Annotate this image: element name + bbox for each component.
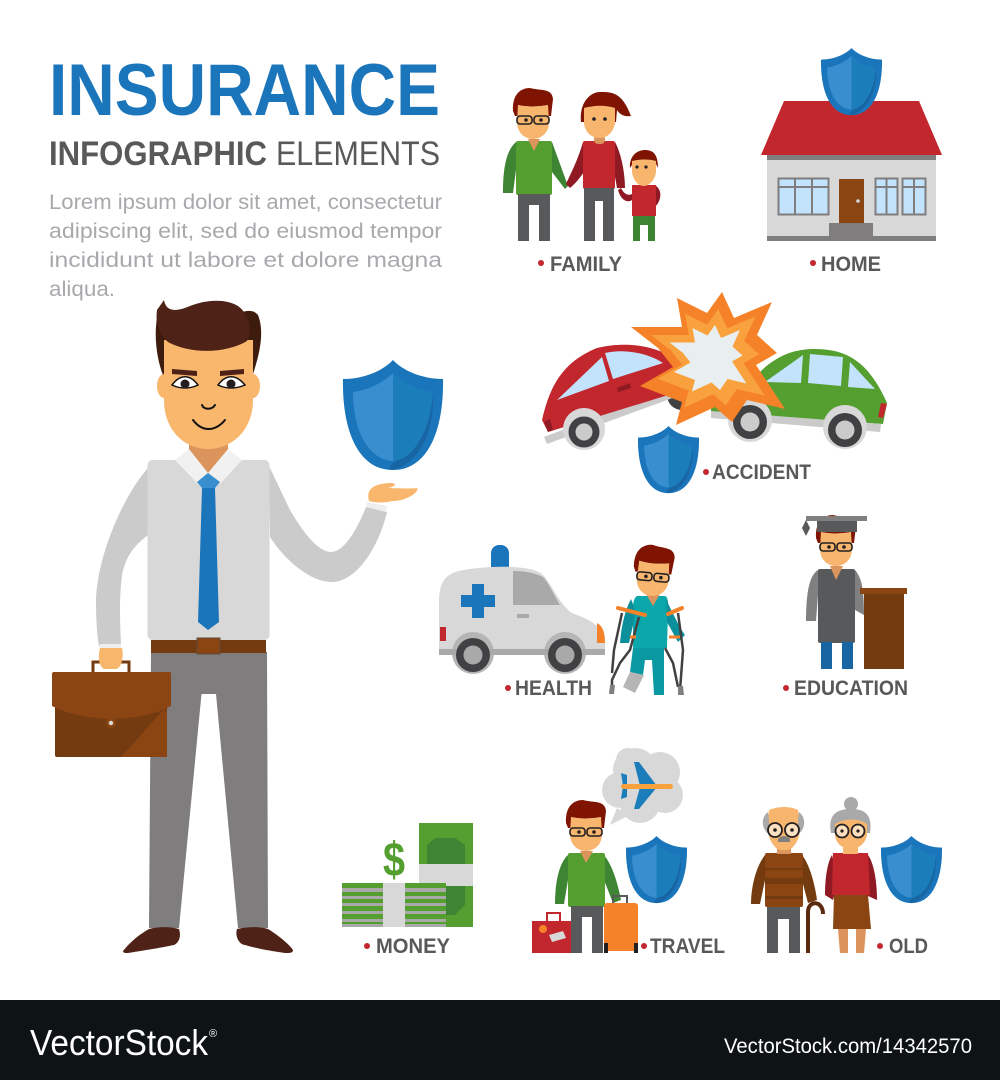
house walls	[767, 160, 936, 236]
left arm	[96, 468, 148, 646]
collar	[175, 449, 242, 484]
label: education: EDUCATION	[794, 677, 908, 700]
ears	[157, 374, 171, 398]
father	[503, 88, 568, 241]
label: travel: TRAVEL	[650, 935, 725, 958]
subtitle: ELEMENTS	[276, 135, 440, 173]
title: INSURANCE: INSURANCE	[49, 50, 440, 131]
item: old	[751, 797, 942, 953]
belt	[151, 640, 266, 653]
old man	[751, 807, 817, 953]
large shield	[343, 360, 443, 470]
right cuff	[366, 502, 387, 512]
label: old	[877, 935, 928, 958]
shoes	[123, 927, 293, 953]
item: education	[802, 515, 907, 669]
green car	[711, 349, 887, 449]
mother	[566, 92, 631, 241]
footer URL: VectorStock.com/14342570	[724, 1035, 972, 1058]
briefcase	[52, 662, 171, 757]
trousers	[149, 652, 268, 928]
item: travel	[532, 748, 687, 953]
ambulance	[439, 545, 605, 674]
footer logo: ®	[209, 1028, 217, 1040]
label: home: HOME	[821, 253, 881, 276]
home shield	[821, 48, 882, 115]
body text: aliqua.	[49, 277, 115, 301]
item: money	[342, 823, 473, 927]
old age shield	[881, 836, 942, 903]
accident shield	[638, 426, 699, 493]
lectern	[860, 588, 907, 669]
footer bar	[0, 1000, 1000, 1080]
windows	[778, 178, 926, 214]
red car	[542, 345, 697, 450]
hair	[157, 300, 250, 351]
explosion	[631, 292, 785, 425]
child	[618, 150, 660, 241]
travel shield	[626, 836, 687, 903]
footer logo: VectorStock	[30, 1022, 209, 1063]
item: home	[761, 48, 942, 241]
label: old: OLD	[889, 935, 928, 958]
eyebrows	[172, 369, 244, 376]
left hand	[99, 648, 123, 669]
right hand	[368, 483, 417, 502]
left cuff	[100, 644, 121, 650]
body text: adipiscing elit, sed do eiusmod tempor	[49, 219, 442, 243]
right arm	[269, 466, 387, 582]
thought cloud with plane	[602, 748, 683, 825]
subtitle	[49, 135, 440, 173]
back hair	[156, 311, 261, 375]
back stack of bills	[419, 823, 473, 927]
front stack of bills	[342, 883, 446, 927]
old woman	[825, 797, 877, 953]
item: health	[439, 543, 685, 695]
injured man with crutches	[609, 543, 685, 695]
body text: Lorem ipsum dolor sit amet, consectetur	[49, 190, 442, 214]
label: health: HEALTH	[515, 677, 592, 700]
roof	[761, 101, 942, 155]
face	[164, 340, 253, 449]
neck	[189, 440, 228, 484]
eyes	[172, 377, 245, 388]
label: family: FAMILY	[550, 253, 622, 276]
shirt	[148, 460, 270, 640]
cane	[808, 903, 823, 953]
label: money: MONEY	[376, 935, 450, 958]
red suitcase	[532, 913, 571, 953]
traveller	[555, 800, 621, 953]
graduate	[802, 515, 867, 669]
door	[839, 179, 864, 223]
businessman	[52, 300, 417, 953]
tie	[197, 473, 220, 488]
orange suitcase	[604, 896, 638, 953]
dollar sign: $	[383, 834, 405, 887]
item: family	[503, 88, 660, 241]
body text: incididunt ut labore et dolore magna	[49, 248, 442, 272]
nose and smile	[193, 405, 225, 429]
item: accident	[542, 292, 887, 493]
label: accident: ACCIDENT	[712, 461, 811, 484]
subtitle: INFOGRAPHIC	[49, 135, 267, 173]
step	[829, 223, 873, 237]
body text	[49, 190, 442, 301]
